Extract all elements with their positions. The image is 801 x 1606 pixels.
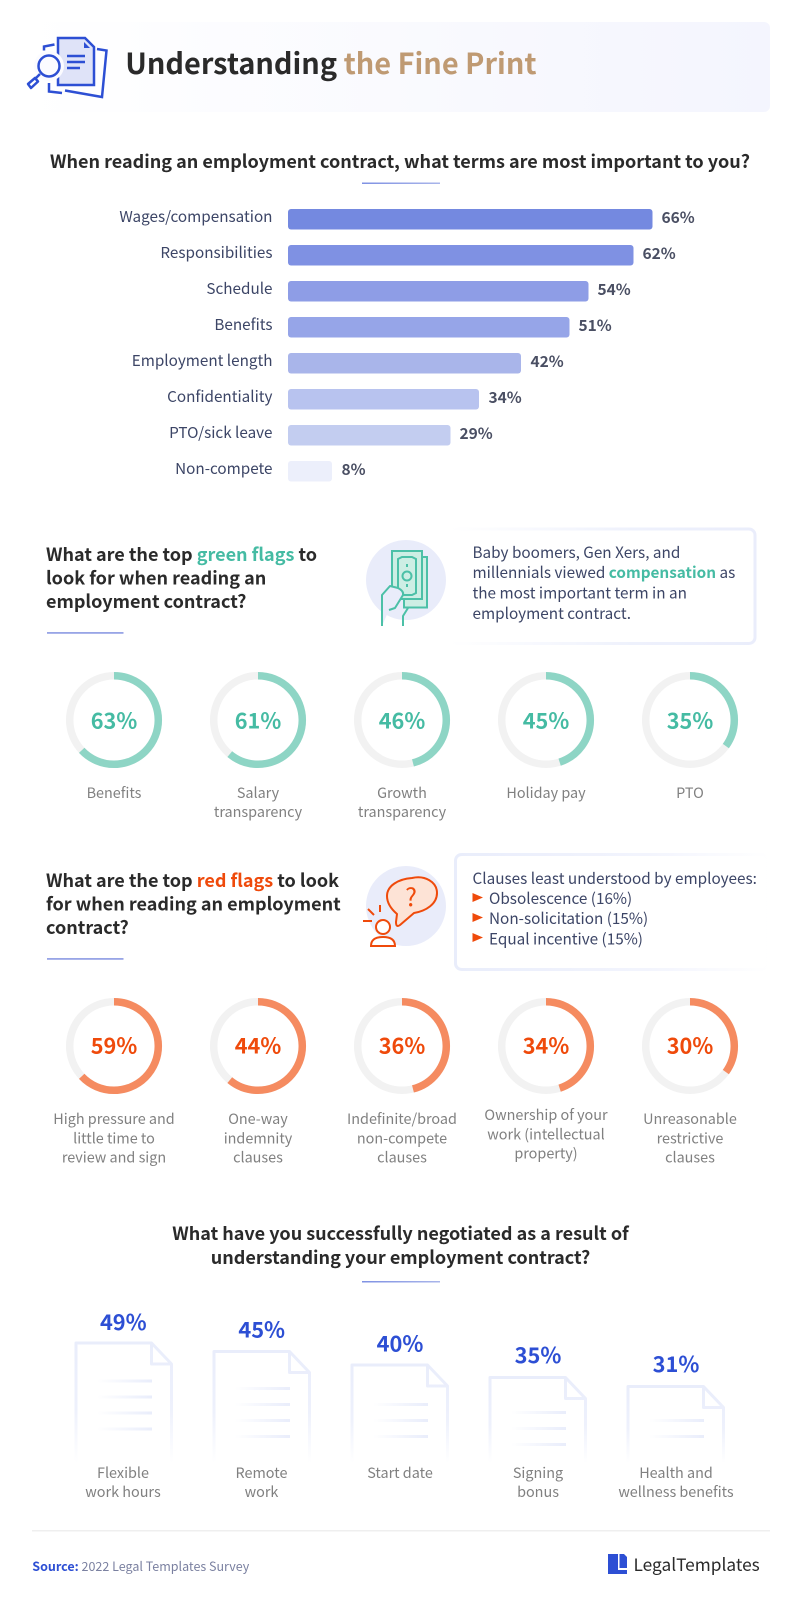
donut: Ownership 34%: work (intellectual [487, 1124, 605, 1144]
callout: least understood clauses [456, 854, 768, 970]
document: Remote work 45%: 45% [238, 1314, 285, 1344]
document: Remote work 45% [214, 1314, 310, 1502]
documents chart: negotiated items [76, 1306, 734, 1502]
donut row: green flags [70, 676, 734, 822]
donut: High pressure 59% [53, 1002, 175, 1168]
donut: High pressure 59%: High pressure and [53, 1108, 175, 1129]
callout: compensation [450, 529, 755, 644]
icon: hand holding money [366, 540, 446, 626]
donut: Non-compete 36%: non-compete [357, 1128, 447, 1148]
heading: green flags: employment contract? [46, 588, 246, 614]
donut: Restrictive 30% [643, 1002, 737, 1168]
donut: Ownership 34%: Ownership of your [484, 1104, 608, 1125]
donut: Restrictive 30%: clauses [665, 1146, 715, 1168]
callout: least understood clauses: Obsolescence (16%) [489, 887, 632, 909]
bar: Responsibilities [160, 241, 676, 266]
donut: Non-compete 36%: Indefinite/broad [347, 1108, 457, 1129]
icon: person with question bubble: ? [405, 878, 417, 914]
donut: One-way indemnity 44%: 44% [235, 1030, 281, 1060]
donut: Restrictive 30%: restrictive [657, 1128, 723, 1148]
bar: Non-compete: 8% [342, 458, 366, 480]
donut: Non-compete 36%: 36% [379, 1030, 425, 1060]
heading: contract terms: When reading an employment contract, what terms are most important to you? [50, 148, 750, 174]
bar: Schedule: 54% [598, 278, 631, 300]
callout: least understood clauses: Equal incentive (15%) [489, 928, 643, 950]
donut: Growth transparency 46%: 46% [379, 704, 425, 736]
callout: least understood clauses: Clauses least understood by employees: [472, 867, 757, 889]
bar: Schedule: Schedule [206, 277, 272, 299]
bar: Wages/compensation [119, 205, 695, 230]
donut: Benefits 63%: 63% [91, 704, 137, 736]
donut: Restrictive 30%: Unreasonable [643, 1108, 737, 1129]
donut: Ownership 34%: property) [514, 1142, 578, 1164]
heading: negotiated [172, 1220, 630, 1282]
document: Health and wellness benefits 31%: Health and [639, 1462, 713, 1483]
callout: compensation: millennials viewed compensation as [472, 561, 735, 583]
donut: Holiday pay 45%: 45% [523, 704, 569, 736]
icon: document with magnifier [28, 38, 106, 97]
donut: Growth transparency 46%: transparency [358, 801, 447, 822]
donut: Salary transparency 61%: transparency [214, 801, 303, 822]
donut: One-way indemnity 44% [214, 1002, 302, 1168]
bar: Benefits: 51% [578, 314, 612, 336]
donut: PTO 35% [646, 676, 734, 803]
heading: green flags: look for when reading an [46, 564, 266, 590]
donut: Non-compete 36%: clauses [377, 1146, 427, 1168]
callout: compensation: Baby boomers, Gen Xers, and [472, 541, 680, 563]
donut: Salary transparency 61%: 61% [235, 704, 281, 736]
document: Start date 40% [352, 1328, 448, 1483]
bar: Confidentiality: Confidentiality [167, 385, 273, 407]
bar: Employment length: Employment length [132, 349, 272, 371]
donut: Ownership 34%: 34% [523, 1030, 569, 1060]
donut: Growth transparency 46%: Growth [377, 782, 427, 803]
donut: One-way indemnity 44%: One-way [228, 1108, 288, 1129]
bar: Non-compete [175, 457, 366, 482]
heading: negotiated: What have you successfully negotiated as a result of [172, 1220, 630, 1246]
document: Flexible work hours 49%: Flexible [97, 1462, 149, 1483]
document: Signing bonus 35%: bonus [517, 1481, 559, 1502]
donut: Growth transparency 46% [358, 676, 447, 822]
donut: PTO 35%: 35% [667, 704, 713, 736]
document: Remote work 45%: Remote [236, 1462, 287, 1483]
heading: red flags: for when reading an employment [46, 890, 341, 916]
donut: PTO 35%: PTO [676, 782, 704, 803]
donut: Restrictive 30%: 30% [667, 1030, 713, 1060]
donut: One-way indemnity 44%: clauses [233, 1146, 283, 1168]
bar: Non-compete: Non-compete [175, 457, 272, 479]
document: Flexible work hours 49%: 49% [100, 1306, 147, 1337]
document: Signing bonus 35%: 35% [515, 1339, 561, 1370]
bar: Employment length [132, 349, 564, 374]
bar: PTO/sick leave: 29% [460, 422, 493, 444]
bar: Schedule [206, 277, 631, 302]
bar: Employment length: 42% [530, 350, 564, 372]
icon: person with question bubble [363, 866, 446, 946]
document: Health and wellness benefits 31%: 31% [653, 1348, 699, 1379]
callout: compensation: employment contract. [472, 602, 631, 624]
donut: Benefits 63% [70, 676, 158, 803]
document: Health and wellness benefits 31% [618, 1348, 734, 1502]
title: Understanding the Fine Print [125, 41, 537, 83]
heading: green flags [46, 541, 317, 634]
donut: Ownership 34% [484, 1002, 608, 1164]
bar: Responsibilities: 62% [642, 242, 676, 264]
heading: red flags [46, 867, 341, 960]
heading: negotiated: understanding your employment contract? [211, 1244, 590, 1270]
donut: High pressure 59%: little time to [73, 1128, 155, 1148]
donut row: red flags [53, 1002, 737, 1168]
donut: Non-compete 36% [347, 1002, 457, 1168]
heading: green flags: What are the top green flags to [46, 541, 317, 567]
document: Flexible work hours 49% [76, 1306, 172, 1502]
document: Health and wellness benefits 31%: wellness benefits [618, 1481, 734, 1502]
bar: Benefits [214, 313, 612, 338]
header banner [24, 22, 770, 112]
donut: Salary transparency 61%: Salary [237, 782, 280, 803]
heading: red flags: contract? [46, 914, 129, 940]
callout: least understood clauses: Non-solicitation (15%) [489, 907, 648, 929]
bar chart: contract terms [119, 205, 695, 482]
bar: Wages/compensation: 66% [662, 206, 695, 228]
donut: One-way indemnity 44%: indemnity [224, 1128, 293, 1148]
bar: Confidentiality [167, 385, 522, 410]
document: Remote work 45%: work [245, 1481, 278, 1502]
bar: Responsibilities: Responsibilities [160, 241, 272, 263]
source note: Source: 2022 Legal Templates Survey [32, 1556, 250, 1575]
logo: LegalTemplates: LegalTemplates [634, 1551, 760, 1576]
bar: PTO/sick leave: PTO/sick leave [169, 421, 272, 443]
donut: Holiday pay 45%: Holiday pay [506, 782, 586, 803]
document: Start date 40%: 40% [377, 1328, 423, 1358]
document: Signing bonus 35%: Signing [513, 1462, 563, 1483]
bar: Confidentiality: 34% [488, 386, 522, 408]
callout: compensation: the most important term in an [472, 582, 687, 604]
donut: Salary transparency 61% [214, 676, 303, 822]
donut: Benefits 63%: Benefits [87, 782, 142, 803]
document: Flexible work hours 49%: work hours [85, 1481, 161, 1502]
bar: Benefits: Benefits [214, 313, 272, 335]
donut: High pressure 59%: 59% [91, 1030, 137, 1060]
bar: Wages/compensation: Wages/compensation [119, 205, 272, 227]
donut: Holiday pay 45% [502, 676, 590, 803]
document: Start date 40%: Start date [367, 1462, 433, 1483]
donut: High pressure 59%: review and sign [62, 1146, 166, 1168]
heading: red flags: What are the top red flags to look [46, 867, 339, 893]
document: Signing bonus 35% [490, 1339, 586, 1502]
bar: PTO/sick leave [169, 421, 493, 446]
